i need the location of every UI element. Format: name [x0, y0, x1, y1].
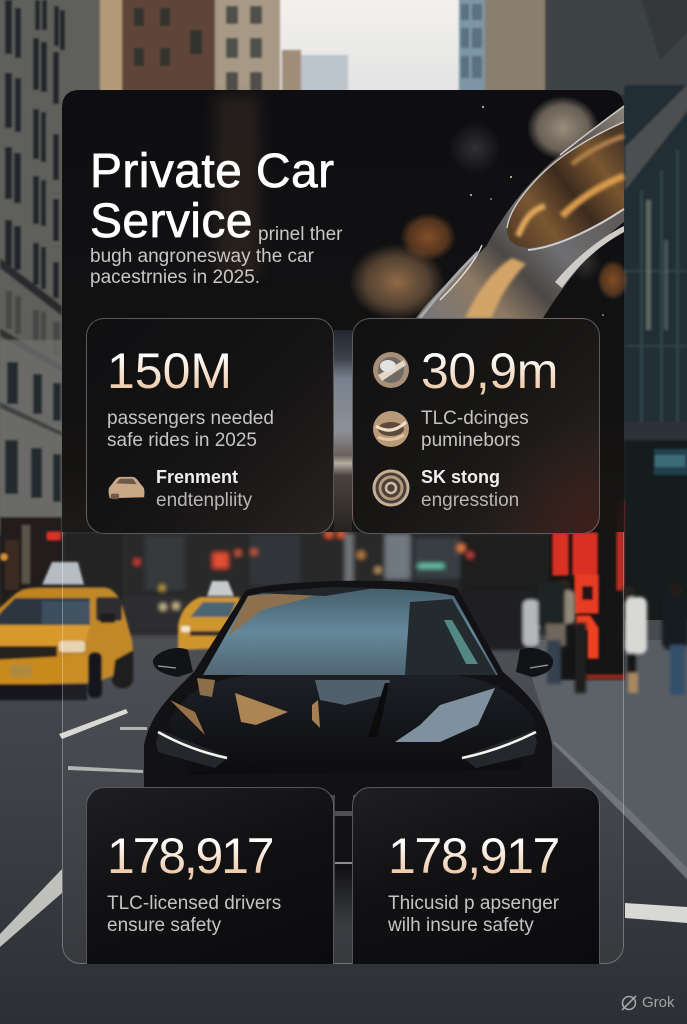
feature label: Frenment: [156, 467, 238, 487]
stat description: [107, 408, 274, 451]
left buildings: [0, 0, 348, 607]
panel: passenger stat: [352, 787, 600, 964]
stat description: TLC-licensed drivers: [107, 893, 281, 914]
feature description: endtenpliity: [156, 490, 252, 511]
panel: passengers stat: [86, 318, 334, 534]
pedestrians: [462, 579, 687, 695]
stat number: 178,917: [107, 828, 272, 884]
chrome strip between cards: [334, 330, 352, 532]
stat description: TLC-dcinges: [421, 408, 529, 429]
main glass panel: [62, 90, 624, 964]
sky: [270, 0, 470, 92]
stat description: [107, 893, 281, 936]
icon: chrome emblem 1: [373, 352, 409, 388]
title: [90, 144, 334, 248]
abstract chrome tube: [416, 106, 624, 318]
feature description: engresstion: [421, 490, 519, 511]
hero car: [144, 581, 553, 926]
stat number: 150M: [107, 343, 232, 399]
stat description: passengers needed: [107, 408, 274, 429]
icon: chrome emblem 2: [373, 411, 409, 447]
watermark: Grok: [622, 994, 675, 1011]
mid street scene: [62, 530, 624, 635]
intro text: bugh angronesway the car: [90, 246, 314, 267]
feature label: SK stong: [421, 467, 500, 487]
stat number: 178,917: [388, 828, 559, 884]
background cars: [122, 596, 186, 630]
red display: [550, 500, 625, 680]
left windows: [5, 0, 65, 298]
stat description: safe rides in 2025: [107, 430, 257, 451]
stat description: [421, 408, 529, 451]
sidewalk: [520, 640, 687, 880]
icon: car: [108, 476, 144, 500]
street: [0, 620, 687, 1024]
panel: 30,9m stat: [352, 318, 600, 534]
intro text: pacestrnies in 2025.: [90, 267, 260, 288]
intro text: [90, 224, 342, 288]
right buildings: [459, 0, 687, 645]
title: Private Car: [90, 144, 334, 198]
stat number: 30,9m: [421, 343, 558, 399]
panel: TLC drivers stat: [86, 787, 334, 964]
stat description: ensure safety: [107, 915, 221, 936]
bokeh lights: [349, 96, 629, 320]
taxi left: [0, 562, 133, 700]
icon: chrome target: [372, 470, 410, 506]
stat description: puminebors: [421, 430, 520, 451]
stat description: [388, 893, 559, 936]
stat description: wilh insure safety: [388, 915, 534, 936]
intro text: prinel ther: [258, 224, 342, 245]
stat description: Thicusid p apsenger: [388, 893, 559, 914]
title: Service: [90, 194, 253, 248]
taxi distant: [178, 581, 240, 650]
lane markings: [0, 709, 687, 947]
watermark: Grok: Grok: [642, 994, 675, 1011]
